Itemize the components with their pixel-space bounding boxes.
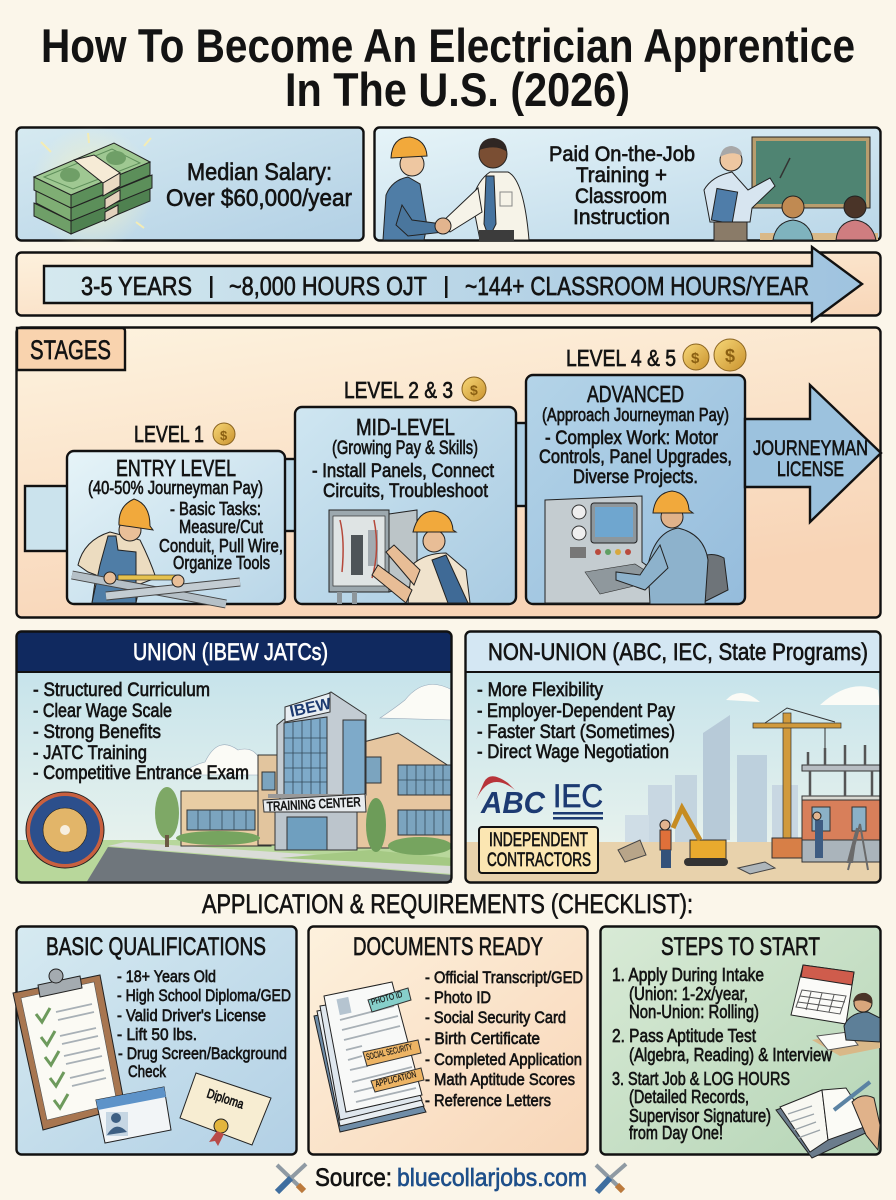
text: documents ready: - Completed Application bbox=[425, 1050, 582, 1069]
text: basic qualifications: - Lift 50 lbs. bbox=[117, 1025, 197, 1044]
card: advanced: Controls, Panel Upgrades, bbox=[539, 447, 732, 468]
callout: independent contractors: CONTRACTORS bbox=[487, 850, 591, 871]
label: level 2 and 3: LEVEL 2 & 3 bbox=[344, 377, 453, 403]
text: union benefits: - Clear Wage Scale bbox=[33, 701, 172, 722]
text: documents ready bbox=[353, 933, 583, 1110]
source line: bluecollarjobs.com bbox=[397, 1164, 587, 1192]
arrow: program duration: ~144+ CLASSROOM HOURS/YEAR bbox=[465, 271, 809, 301]
icon: person filling form bbox=[812, 993, 880, 1056]
card: entry level bbox=[67, 451, 285, 604]
step connectors bbox=[25, 423, 527, 551]
callout: independent contractors bbox=[479, 827, 598, 873]
label: level 2 and 3: $ bbox=[470, 382, 478, 398]
icon: document stack bbox=[314, 982, 426, 1132]
label: level 1: LEVEL 1 bbox=[134, 421, 204, 447]
icon: IBEW seal bbox=[26, 792, 104, 868]
text: steps to start: (Algebra, Reading) & Interview bbox=[629, 1045, 833, 1065]
arrow: program duration: 3-5 YEARS bbox=[81, 271, 192, 301]
card: mid-level: MID-LEVEL bbox=[356, 414, 455, 440]
text: training bbox=[549, 143, 695, 229]
title bbox=[41, 19, 855, 116]
text: non-union benefits bbox=[477, 680, 675, 763]
arrow: program duration: ~8,000 HOURS OJT bbox=[229, 271, 427, 301]
label: level 4 and 5: $ bbox=[691, 350, 700, 367]
text: training: Instruction bbox=[573, 206, 670, 229]
panel: stages bbox=[16, 328, 881, 618]
card: advanced: - Complex Work: Motor bbox=[545, 428, 719, 449]
text: documents ready: - Reference Letters bbox=[425, 1091, 551, 1110]
text: union benefits: - Strong Benefits bbox=[33, 722, 161, 743]
heading: union bbox=[17, 632, 451, 672]
icon: worker and manager handshake bbox=[383, 137, 529, 241]
icon: clipboard with checklist bbox=[13, 969, 125, 1130]
icon: ID card bbox=[96, 1087, 171, 1143]
text: documents ready: - Official Transcript/GED bbox=[425, 968, 583, 987]
text: training: Classroom bbox=[575, 185, 667, 208]
text: documents ready: - Photo ID bbox=[425, 988, 491, 1007]
card: entry level: (40-50% Journeyman Pay) bbox=[88, 478, 263, 498]
text: union benefits: - Competitive Entrance Exam bbox=[33, 763, 249, 784]
icon: diploma bbox=[180, 1073, 271, 1146]
card: entry level: Measure/Cut bbox=[179, 517, 263, 537]
text: basic qualifications: BASIC QUALIFICATIONS bbox=[46, 933, 266, 961]
logos: ABC and IEC: ABC bbox=[480, 785, 546, 820]
text: training: Training + bbox=[576, 164, 667, 187]
icon: diploma: Diploma bbox=[205, 1086, 246, 1112]
text: basic qualifications bbox=[46, 933, 291, 1081]
text: non-union benefits: - More Flexibility bbox=[477, 680, 603, 701]
arrow: program duration bbox=[44, 247, 862, 321]
label: level 4 and 5: $ bbox=[725, 346, 735, 366]
card: mid-level: - Install Panels, Connect bbox=[312, 461, 495, 482]
panel: documents ready bbox=[308, 926, 588, 1154]
text: steps to start: Supervisor Signature) bbox=[629, 1106, 771, 1126]
illustration: IBEW training center: IBEW bbox=[288, 695, 334, 721]
text: steps to start bbox=[612, 933, 833, 1143]
panel: steps to start bbox=[600, 926, 880, 1158]
text: steps to start: from Day One! bbox=[629, 1123, 723, 1143]
icon: document stack: PHOTO ID bbox=[370, 989, 404, 1007]
icon: teacher at chalkboard bbox=[704, 137, 878, 241]
text: documents ready: DOCUMENTS READY bbox=[353, 933, 543, 961]
icon: right tools bbox=[596, 1164, 626, 1192]
heading: non-union bbox=[466, 632, 880, 672]
icon: left tools bbox=[277, 1164, 306, 1192]
logos: ABC and IEC: IEC bbox=[553, 778, 603, 814]
illustration: IBEW training center bbox=[17, 684, 452, 883]
icon: technician at control console bbox=[545, 491, 728, 604]
card: entry level: - Basic Tasks: bbox=[170, 499, 261, 519]
card: entry level: ENTRY LEVEL bbox=[116, 455, 236, 481]
text: documents ready: - Math Aptitude Scores bbox=[425, 1070, 575, 1089]
text: documents ready: - Birth Certificate bbox=[425, 1029, 540, 1048]
icon: stack of money bbox=[30, 126, 154, 250]
text: basic qualifications: Check bbox=[128, 1062, 166, 1081]
source line bbox=[277, 1164, 626, 1192]
text: steps to start: STEPS TO START bbox=[661, 933, 820, 961]
label: level 4 and 5: LEVEL 4 & 5 bbox=[566, 345, 676, 371]
illustration: construction site and skyline bbox=[466, 686, 880, 882]
text: non-union benefits: - Employer-Dependent Pay bbox=[477, 701, 675, 722]
text: steps to start: 2. Pass Aptitude Test bbox=[612, 1026, 756, 1046]
heading: stages tab: STAGES bbox=[30, 335, 111, 365]
illustration: IBEW training center: TRAINING CENTER bbox=[266, 794, 361, 814]
icon: document stack: SOCIAL SECURITY bbox=[365, 1042, 413, 1062]
card: entry level: Conduit, Pull Wire, bbox=[159, 536, 283, 556]
panel: non-union bbox=[465, 631, 881, 883]
source line: Source: bbox=[315, 1164, 392, 1192]
text: steps to start: (Detailed Records, bbox=[629, 1087, 749, 1107]
callout: independent contractors: INDEPENDENT bbox=[489, 830, 588, 851]
icon: apprentice cutting conduit bbox=[72, 499, 240, 604]
icon: electrician at panel bbox=[329, 510, 470, 604]
text: basic qualifications: - 18+ Years Old bbox=[117, 967, 216, 986]
card: mid-level bbox=[295, 407, 516, 604]
heading: stages tab bbox=[17, 328, 125, 370]
text: median salary: Median Salary: bbox=[187, 159, 332, 186]
card: advanced bbox=[526, 375, 745, 604]
text: training: Paid On-the-Job bbox=[549, 143, 695, 166]
text: union benefits: - Structured Curriculum bbox=[33, 680, 210, 701]
text: median salary: Over $60,000/year bbox=[166, 185, 352, 212]
card: advanced: ADVANCED bbox=[587, 381, 684, 407]
text: non-union benefits: - Faster Start (Sometimes) bbox=[477, 722, 675, 743]
card: mid-level: Circuits, Troubleshoot bbox=[323, 481, 489, 502]
arrow: journeyman license bbox=[745, 385, 881, 522]
text: steps to start: Non-Union: Rolling) bbox=[629, 1002, 759, 1022]
text: union benefits bbox=[33, 680, 249, 784]
text: basic qualifications: - Valid Driver's License bbox=[117, 1006, 266, 1025]
icon: document stack: APPLICATION bbox=[374, 1069, 417, 1089]
text: documents ready: - Social Security Card bbox=[425, 1008, 566, 1027]
text: median salary bbox=[166, 159, 352, 212]
panel: basic qualifications bbox=[13, 926, 296, 1154]
panel: median salary bbox=[16, 126, 364, 250]
arrow: journeyman license: JOURNEYMAN bbox=[753, 437, 868, 460]
title: In The U.S. (2026) bbox=[285, 63, 630, 116]
panel: duration band bbox=[16, 247, 880, 321]
text: steps to start: (Union: 1-2x/year, bbox=[629, 984, 748, 1004]
heading: application and requirements: APPLICATION & REQUIREMENTS (CHECKLIST): bbox=[202, 889, 693, 919]
panel: paid training bbox=[374, 128, 880, 241]
icon: calendar bbox=[791, 965, 854, 1024]
label: level 4 and 5 bbox=[566, 339, 746, 371]
card: advanced: Diverse Projects. bbox=[573, 467, 698, 488]
card: mid-level: (Growing Pay & Skills) bbox=[332, 438, 478, 459]
logos: ABC and IEC bbox=[476, 776, 603, 820]
text: steps to start: 3. Start Job & LOG HOURS bbox=[612, 1069, 790, 1089]
text: non-union benefits: - Direct Wage Negotiation bbox=[477, 742, 669, 763]
text: steps to start: 1. Apply During Intake bbox=[612, 965, 764, 985]
panel: union bbox=[16, 631, 452, 883]
text: basic qualifications: - High School Diploma/GED bbox=[117, 986, 291, 1005]
text: union benefits: - JATC Training bbox=[33, 743, 147, 764]
arrow: journeyman license: LICENSE bbox=[777, 458, 844, 481]
card: advanced: (Approach Journeyman Pay) bbox=[542, 405, 729, 425]
card: entry level: Organize Tools bbox=[173, 553, 270, 573]
label: level 1: $ bbox=[220, 428, 228, 443]
icon: logbook and pen bbox=[776, 1082, 880, 1158]
text: basic qualifications: - Drug Screen/Background bbox=[118, 1044, 287, 1063]
heading: union: UNION (IBEW JATCs) bbox=[133, 639, 328, 666]
